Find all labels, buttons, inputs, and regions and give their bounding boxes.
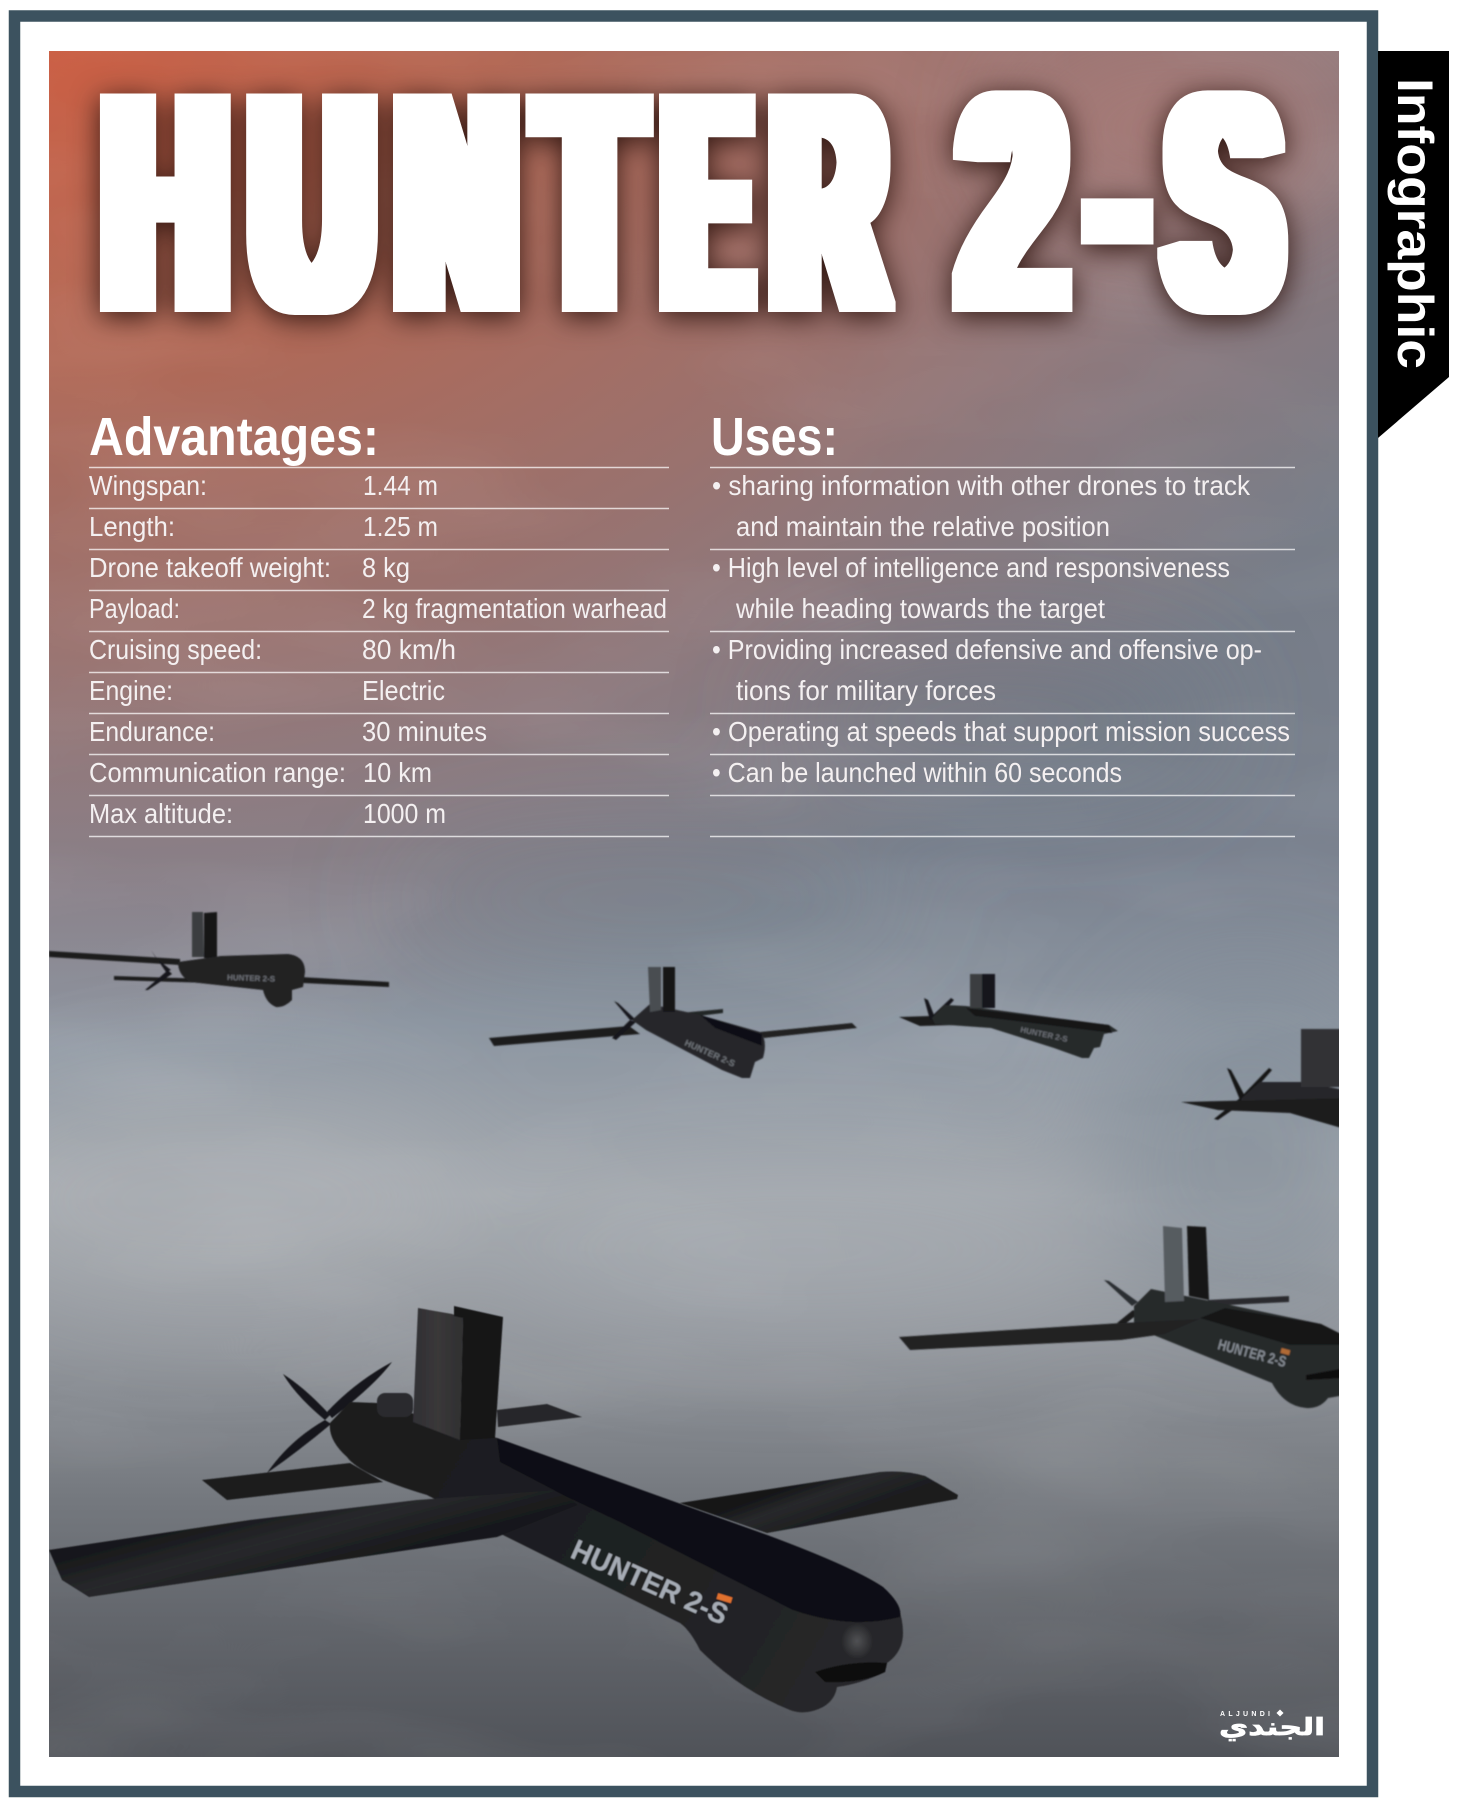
table: advantages: Max altitude:	[89, 798, 233, 829]
table: advantages: 2 kg fragmentation warhead	[362, 593, 667, 624]
table: advantages: Engine:	[89, 675, 173, 706]
list: uses: tions for military forces	[736, 675, 996, 706]
table: advantages: 80 km/h	[362, 634, 456, 665]
drone: mid right: HUNTER 2-S	[1216, 1336, 1288, 1371]
table: advantages	[89, 468, 669, 836]
table: advantages: Cruising speed:	[89, 634, 262, 665]
title: HUNTER 2-S: S	[1168, 34, 1279, 372]
side tab: Infographic: Infographic	[1387, 78, 1443, 369]
list: uses: and maintain the relative position	[736, 511, 1110, 542]
table: advantages: 1.25 m	[363, 511, 438, 542]
drone: right edge	[1181, 1029, 1345, 1129]
drone: upper centre: HUNTER 2-S	[683, 1038, 737, 1069]
title: HUNTER 2-S: -	[1091, 27, 1144, 365]
table: advantages: 30 minutes	[362, 716, 487, 747]
table: advantages: Endurance:	[89, 716, 215, 747]
drone: large foreground	[49, 1306, 958, 1712]
table: advantages: Payload:	[89, 593, 180, 624]
drone: top left: HUNTER 2-S	[227, 973, 276, 984]
table: advantages: 1000 m	[363, 798, 446, 829]
drone: large foreground: HUNTER 2-S	[566, 1534, 733, 1632]
table: advantages: Length:	[89, 511, 175, 542]
drone: top left	[49, 912, 389, 1007]
list: uses: • Providing increased defensive and offensive op-	[712, 634, 1262, 665]
table: advantages: Wingspan:	[89, 470, 207, 501]
list: uses	[710, 468, 1295, 836]
title: HUNTER 2-S: 2	[961, 34, 1064, 372]
list: uses: • Operating at speeds that support mission success	[712, 716, 1290, 747]
drone: mid right	[899, 1226, 1345, 1408]
table: advantages: Electric	[362, 675, 445, 706]
table: advantages: 1.44 m	[363, 470, 438, 501]
title: HUNTER 2-S: T	[540, 34, 640, 372]
drone: upper centre	[489, 967, 857, 1078]
title: HUNTER 2-S: H	[105, 34, 226, 372]
title: HUNTER 2-S: U	[252, 34, 372, 372]
logo: Al Jundi: الجندي	[1219, 1713, 1325, 1741]
title: HUNTER 2-S: N	[398, 34, 515, 372]
title: HUNTER 2-S: E	[667, 34, 747, 372]
list: uses: • High level of intelligence and responsiveness	[712, 552, 1230, 583]
logo: Al Jundi	[1219, 1709, 1325, 1741]
heading: Advantages: Advantages:	[89, 407, 379, 467]
drone: upper right centre	[899, 974, 1118, 1058]
drone: upper right centre: HUNTER 2-S	[1020, 1025, 1069, 1044]
table: advantages: Drone takeoff weight:	[89, 552, 331, 583]
table: advantages: 10 km	[363, 757, 432, 788]
title: HUNTER 2-S: R	[774, 34, 883, 372]
side tab: Infographic	[1378, 51, 1449, 438]
list: uses: while heading towards the target	[735, 593, 1105, 624]
list: uses: • Can be launched within 60 seconds	[712, 757, 1122, 788]
list: uses: • sharing information with other drones to track	[712, 470, 1251, 501]
logo: Al Jundi: ALJUNDI	[1220, 1711, 1270, 1718]
table: advantages: Communication range:	[89, 757, 346, 788]
table: advantages: 8 kg	[362, 552, 410, 583]
title: HUNTER 2-S	[105, 27, 1279, 372]
heading: Uses: Uses:	[711, 407, 838, 467]
